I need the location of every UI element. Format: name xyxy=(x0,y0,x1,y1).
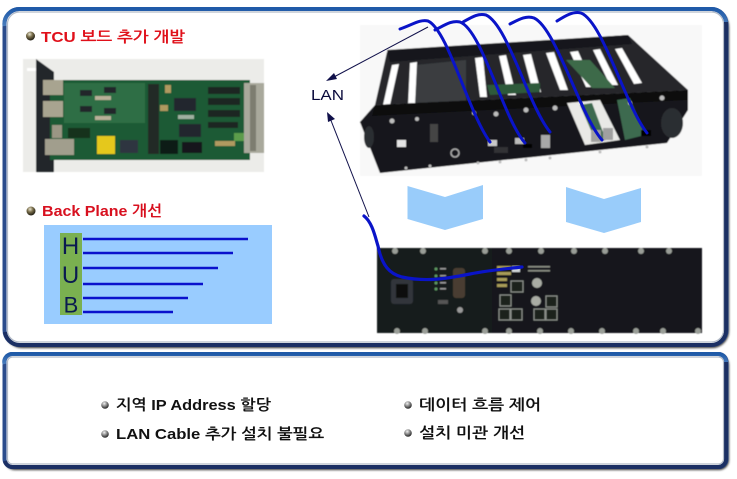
list: left features xyxy=(101,397,324,443)
panel: hardware xyxy=(4,9,729,348)
photo: back plane board xyxy=(377,248,702,334)
label: LAN: LAN xyxy=(311,87,344,104)
list: right features xyxy=(404,397,541,442)
HUB block: H xyxy=(62,233,79,260)
HUB block: B xyxy=(64,292,78,318)
item: local IP: 지역 IP Address 할당 xyxy=(116,397,271,414)
photo: TCU board xyxy=(23,59,264,172)
HUB block xyxy=(60,233,82,318)
cables: chassis to LAN xyxy=(400,13,647,143)
heading: back plane: Back Plane 개선 xyxy=(42,203,162,220)
item: LAN cable: LAN Cable 추가 설치 불필요 xyxy=(116,426,324,443)
cable: back plane to LAN xyxy=(364,216,522,280)
arrow: back plane to LAN xyxy=(327,112,369,217)
arrow: left down chevron xyxy=(408,185,483,230)
item: data flow: 데이터 흐름 제어 xyxy=(419,397,541,414)
item: wiring appearance: 설치 미관 개선 xyxy=(419,425,525,442)
heading: TCU board: TCU 보드 추가 개발 xyxy=(41,29,185,46)
panel: summary xyxy=(4,354,729,470)
photo: rack chassis xyxy=(360,25,702,176)
arrow: right down chevron xyxy=(566,187,641,233)
wiring lines xyxy=(83,239,248,312)
diagram: back plane wiring xyxy=(44,225,272,324)
arrow: chassis to LAN xyxy=(326,27,428,81)
HUB block: U xyxy=(62,262,79,289)
